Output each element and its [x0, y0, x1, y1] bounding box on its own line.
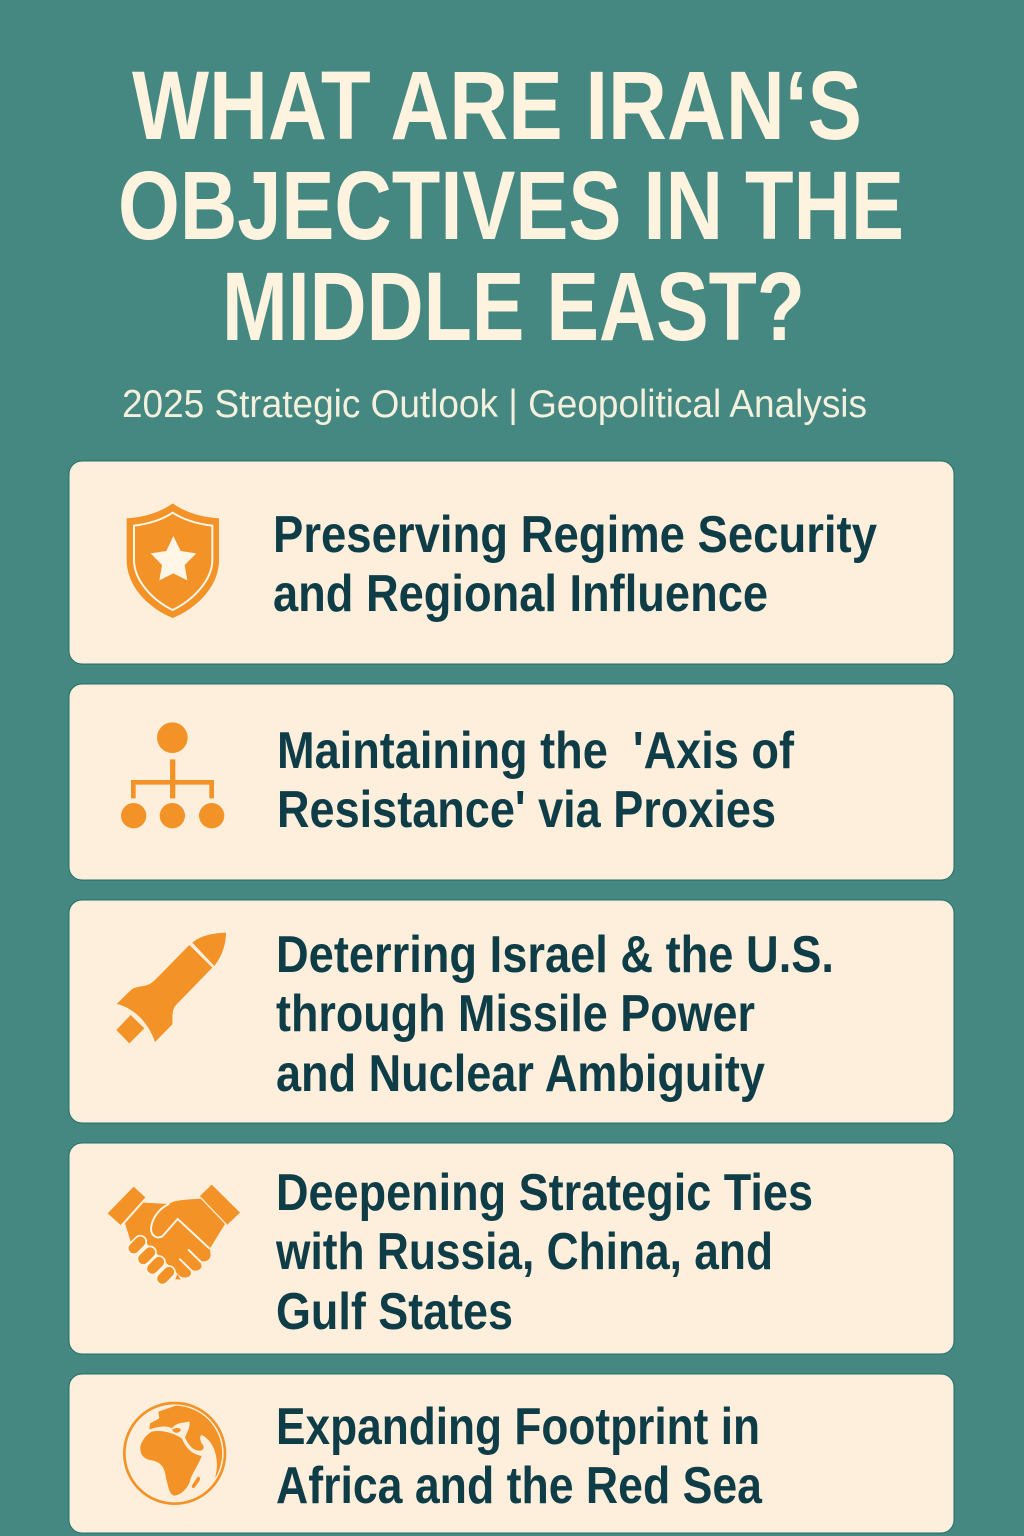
text: regime security: and Regional Influence	[273, 565, 768, 623]
text: axis of resistance: Resistance' via Proxies	[277, 781, 776, 839]
text: deterrence	[276, 926, 834, 1103]
text: strategic ties: Deepening Strategic Ties	[276, 1164, 813, 1222]
text: africa and red sea	[276, 1398, 763, 1515]
title: MIDDLE EAST?	[222, 252, 805, 361]
text: strategic ties: Gulf States	[276, 1283, 513, 1341]
panel: deterrence	[69, 900, 954, 1123]
panel: axis of resistance	[69, 684, 954, 880]
title: WHAT ARE IRAN‘S	[132, 51, 862, 160]
panel: strategic ties	[69, 1143, 954, 1354]
text: deterrence: through Missile Power	[276, 985, 755, 1043]
text: axis of resistance	[277, 722, 795, 839]
icon: missile	[116, 933, 226, 1043]
panel: regime security	[69, 461, 954, 664]
icon: globe	[124, 1403, 225, 1504]
icon: shield with star	[127, 503, 219, 618]
text: africa and red sea: Expanding Footprint in	[276, 1398, 760, 1456]
icon: network hierarchy	[121, 722, 224, 828]
panel: africa and red sea	[69, 1374, 954, 1533]
text: africa and red sea: Africa and the Red Sea	[276, 1457, 763, 1515]
title	[118, 51, 904, 361]
text: deterrence: and Nuclear Ambiguity	[276, 1045, 765, 1103]
text: strategic ties: with Russia, China, and	[275, 1223, 773, 1281]
text: regime security: Preserving Regime Security	[273, 506, 877, 564]
text: axis of resistance: Maintaining the 'Axis of	[277, 722, 795, 780]
text: regime security	[273, 506, 877, 623]
text: deterrence: Deterring Israel & the U.S.	[276, 926, 834, 984]
subtitle: 2025 Strategic Outlook | Geopolitical Analysis	[122, 383, 867, 426]
text: strategic ties	[275, 1164, 813, 1341]
icon: handshake	[108, 1185, 240, 1287]
